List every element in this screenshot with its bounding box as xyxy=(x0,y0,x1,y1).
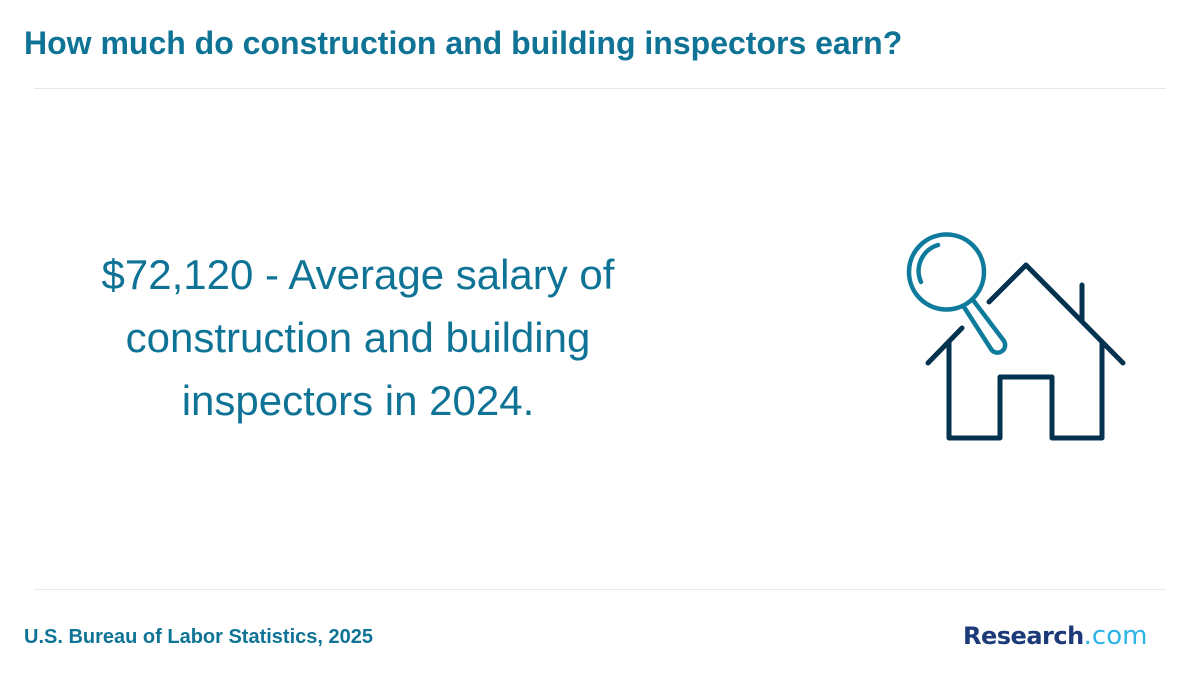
source: U.S. Bureau of Labor Statistics, 2025 xyxy=(24,626,373,648)
main statistic text: $72,120 - Average salary of xyxy=(102,251,614,298)
icon: house with magnifying glass xyxy=(906,232,1126,440)
main statistic text xyxy=(102,251,614,424)
icon: house xyxy=(928,265,1123,438)
title: How much do construction and building inspectors earn? xyxy=(24,25,902,61)
main statistic text: construction and building xyxy=(126,314,590,361)
icon: magnifying glass xyxy=(909,234,1005,353)
logo: Research.com xyxy=(963,621,1147,651)
main statistic text: inspectors in 2024. xyxy=(182,377,534,424)
